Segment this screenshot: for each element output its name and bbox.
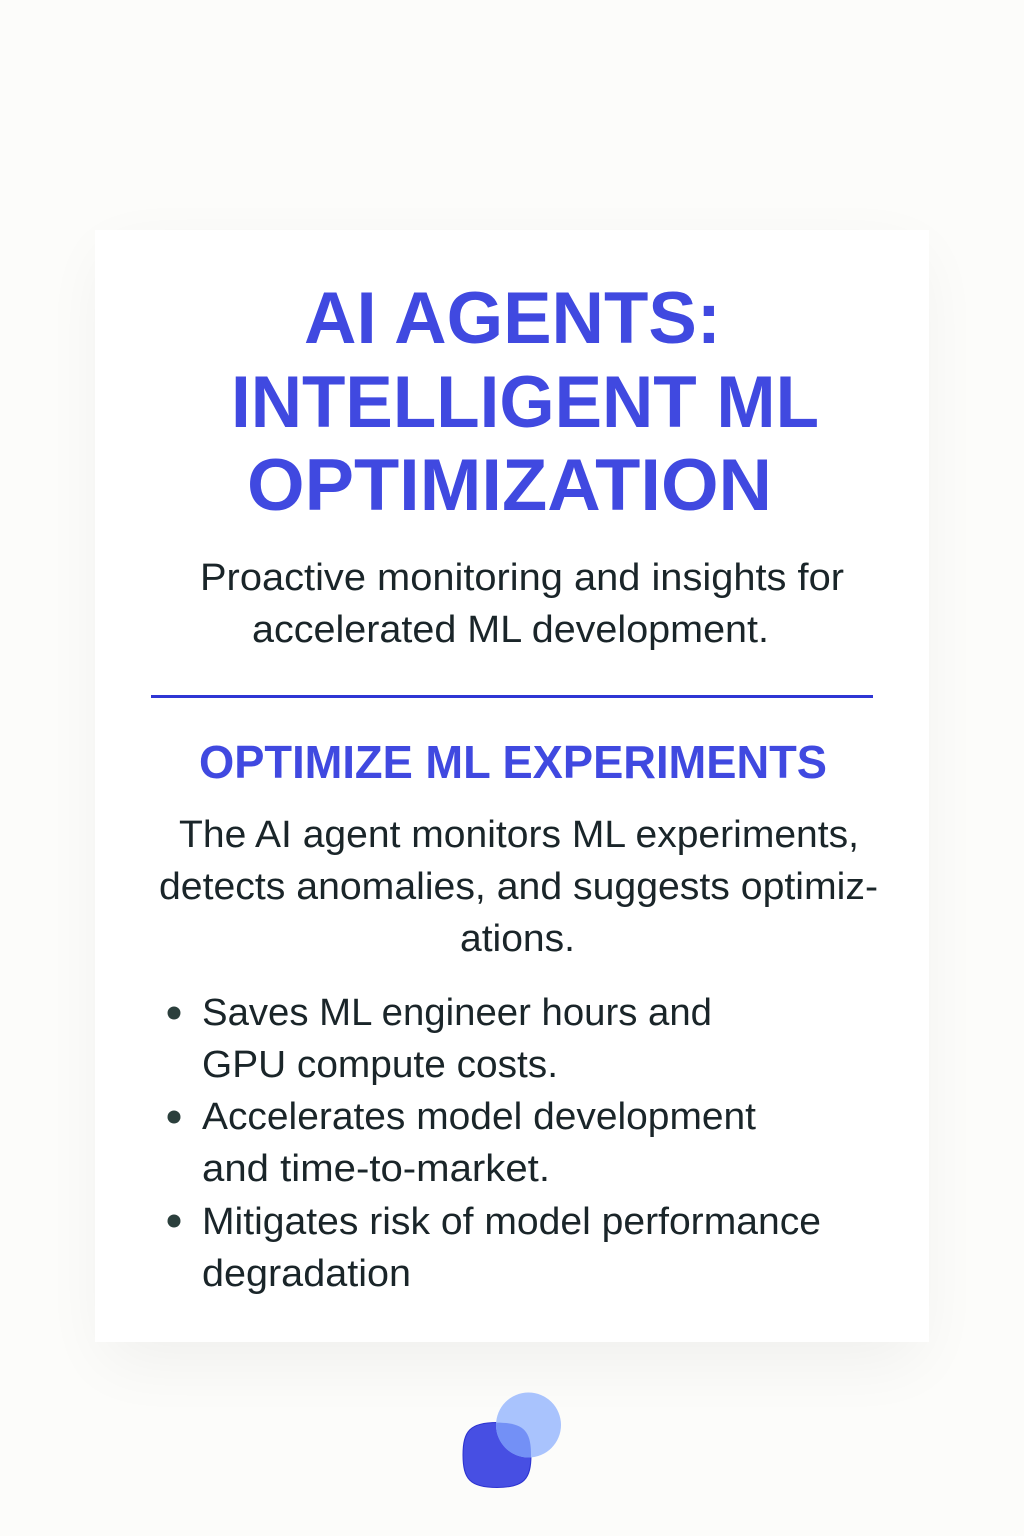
bullet: saves hours and costs: Saves ML engineer hours and [202, 992, 712, 1034]
bullet: mitigates risk [168, 1201, 821, 1295]
benefits list [168, 992, 821, 1295]
description: ations. [460, 918, 575, 960]
bullet: saves hours and costs [168, 992, 712, 1086]
bullet: saves hours and costs: GPU compute costs. [202, 1044, 558, 1086]
panel: main card [95, 230, 929, 1342]
title: INTELLIGENT ML [231, 362, 819, 443]
bullet: accelerates development: Accelerates model development [202, 1096, 756, 1138]
title [231, 278, 819, 526]
bullet: accelerates development [168, 1096, 756, 1190]
bullet: mitigates risk: Mitigates risk of model performance [202, 1201, 821, 1243]
bullet: mitigates risk: degradation [202, 1253, 411, 1295]
subtitle: Proactive monitoring and insights for [200, 557, 844, 599]
bullet: accelerates development: and time-to-market. [202, 1148, 550, 1190]
description [159, 814, 878, 960]
subtitle: accelerated ML development. [252, 609, 769, 651]
description: detects anomalies, and suggests optimiz- [159, 866, 878, 908]
description: The AI agent monitors ML experiments, [179, 814, 859, 856]
icon: logo [463, 1392, 561, 1488]
subtitle [200, 557, 844, 651]
title: AI AGENTS: [304, 278, 721, 359]
section heading: OPTIMIZE ML EXPERIMENTS [199, 736, 827, 788]
title: OPTIMIZATION [247, 445, 772, 526]
